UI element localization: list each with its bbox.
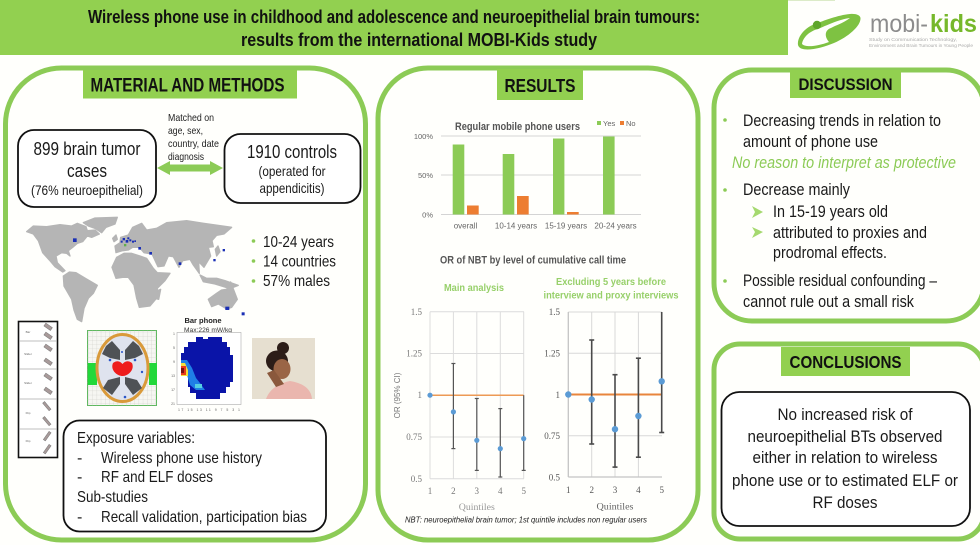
text: matching criteria: age, sex, xyxy=(168,125,203,137)
bar chart: regular mobile phone users: 100% xyxy=(414,132,433,141)
logo: mobi-kids: kids xyxy=(930,10,977,38)
box: exposure variables: RF and ELF doses xyxy=(101,469,213,486)
discussion bullets: attributed to proxies and xyxy=(773,224,927,242)
heading: conclusions: CONCLUSIONS xyxy=(790,352,902,372)
discussion bullets: prodromal effects. xyxy=(773,244,887,262)
box: conclusion statement: RF doses xyxy=(812,494,878,512)
box: brain tumor cases: (76% neuroepithelial) xyxy=(31,182,143,198)
chart: excluding 5 years OR: 1 xyxy=(566,485,571,495)
figure: SAR heat map: 5 xyxy=(173,346,175,350)
list: study population: 10-24 years xyxy=(263,234,334,251)
box: conclusion statement: neuroepithelial BTs observed xyxy=(748,428,942,446)
chart: excluding 5 years OR: 2 xyxy=(589,485,594,495)
heading: OR of NBT: OR of NBT by level of cumulative call time xyxy=(440,254,626,266)
figure: SAR heat map: 13 xyxy=(171,374,175,378)
heading: discussion: DISCUSSION xyxy=(798,75,892,94)
chart: main analysis OR: 0.5 xyxy=(411,474,422,484)
chart: excluding 5 years OR: 3 xyxy=(613,485,618,495)
discussion bullets: amount of phone use xyxy=(743,133,878,151)
subheading: excluding 5 years: Excluding 5 years before xyxy=(556,276,666,288)
box: controls: 1910 controls xyxy=(247,142,337,162)
logo: mobi-kids xyxy=(788,0,977,49)
box: exposure variables: Recall validation, participation bias xyxy=(101,509,307,526)
bar chart: regular mobile phone users: Regular mobile phone users xyxy=(455,121,580,133)
discussion bullets: Decrease mainly xyxy=(743,181,851,199)
discussion bullets: Decreasing trends in relation to xyxy=(743,112,941,130)
heading: conclusions xyxy=(781,347,910,376)
chart: excluding 5 years OR: 0.75 xyxy=(544,431,560,441)
heading: material and methods: MATERIAL AND METHODS xyxy=(90,74,284,96)
chart: main analysis OR: 1 xyxy=(428,486,432,496)
box: exposure variables: - xyxy=(77,469,82,486)
chart: main analysis OR xyxy=(393,307,526,513)
figure: phone positions table: Flip xyxy=(26,439,31,443)
world map xyxy=(27,217,245,322)
figure: phone positions table: Slider xyxy=(24,381,32,385)
footnote: NBT definition: NBT: neuroepithelial brain tumor; 1st quintile includes non regular users xyxy=(405,514,648,524)
box: exposure variables: Exposure variables: xyxy=(77,430,195,447)
logo wordmark: mobi- xyxy=(870,10,928,38)
logo tagline: Study on Communication Technology, xyxy=(869,37,957,42)
chart: excluding 5 years OR: 1 xyxy=(556,390,560,400)
subheading: main analysis: Main analysis xyxy=(444,282,504,294)
figure: SAR heat map: 1 xyxy=(173,332,175,336)
title banner xyxy=(0,0,788,55)
heading: discussion xyxy=(790,70,901,98)
subheading: excluding 5 years: interview and proxy interviews xyxy=(544,290,679,302)
figure: SAR heat map xyxy=(171,316,241,412)
list: study population xyxy=(252,234,336,290)
logo swoosh icon xyxy=(798,14,861,49)
photo: child with phone xyxy=(252,338,315,399)
figure: phone positions table xyxy=(18,322,58,458)
heading: results xyxy=(497,69,583,100)
box: brain tumor cases xyxy=(18,130,156,207)
discussion bullets: In 15-19 years old xyxy=(773,203,888,221)
chart: main analysis OR: 0.75 xyxy=(406,432,422,442)
box: conclusion statement: either in relation to wireless xyxy=(752,449,938,467)
chart: excluding 5 years OR: 4 xyxy=(636,485,641,495)
arrow: matched cases and controls xyxy=(157,161,223,175)
box: controls: (operated for xyxy=(258,163,326,179)
discussion bullets xyxy=(723,112,956,311)
bar chart: regular mobile phone users: 15-19 years xyxy=(545,222,587,230)
chart: excluding 5 years OR: 1.5 xyxy=(549,307,560,317)
chart: main analysis OR: 1.5 xyxy=(411,307,422,317)
panel: conclusions xyxy=(714,344,980,539)
bar chart: regular mobile phone users: 10-14 years xyxy=(495,222,537,230)
box: exposure variables: Sub-studies xyxy=(77,489,148,506)
chart: main analysis OR: 1 xyxy=(418,390,422,400)
bar chart: regular mobile phone users xyxy=(414,119,641,230)
box: exposure variables: Wireless phone use history xyxy=(101,450,262,467)
text: matching criteria: Matched on xyxy=(168,112,214,124)
list: study population: 14 countries xyxy=(263,254,336,270)
figure: SAR heat map: 21 xyxy=(171,402,175,406)
bar chart: regular mobile phone users: overall xyxy=(454,222,478,230)
bar chart: regular mobile phone users: 0% xyxy=(422,210,433,220)
text: matching criteria xyxy=(168,112,219,163)
chart: main analysis OR: 3 xyxy=(475,486,480,496)
title banner: results from the international MOBI-Kids study xyxy=(241,30,597,50)
text: matching criteria: diagnosis xyxy=(168,151,204,163)
discussion bullets: cannot rule out a small risk xyxy=(743,293,915,311)
heading: results: RESULTS xyxy=(504,75,576,96)
chart: excluding 5 years OR: 1.25 xyxy=(544,348,560,358)
box: exposure variables xyxy=(64,420,326,532)
chart: main analysis OR: Quintiles xyxy=(459,503,495,513)
chart: main analysis OR: 4 xyxy=(498,486,503,496)
figure: SAR heat map: 9 xyxy=(173,360,175,364)
figure: SAR heat map: 17 15 13 11 9 7 5 3 1 xyxy=(178,408,240,412)
chart: main analysis OR: 2 xyxy=(451,486,456,496)
subheading: excluding 5 years xyxy=(544,276,679,302)
legend: Yes xyxy=(603,119,615,128)
figure: brain exposure model xyxy=(88,330,157,406)
box: controls: appendicitis) xyxy=(260,180,324,196)
box: conclusion statement xyxy=(722,392,970,526)
bar chart: regular mobile phone users: 20-24 years xyxy=(594,222,637,230)
discussion bullets: Possible residual confounding – xyxy=(743,272,938,290)
chart: main analysis OR: OR (95% CI) xyxy=(393,372,402,418)
box: brain tumor cases: 899 brain tumor xyxy=(34,139,140,159)
chart: excluding 5 years OR: Quintiles xyxy=(596,502,634,512)
chart: excluding 5 years OR: 5 xyxy=(659,485,664,495)
heading: material and methods xyxy=(83,70,297,98)
title banner: Wireless phone use in childhood and adolescence and neuroepithelial brain tumours: xyxy=(88,7,700,27)
box: conclusion statement: phone use or to estimated ELF or xyxy=(732,472,958,490)
bar chart: regular mobile phone users: 50% xyxy=(418,171,433,180)
box: exposure variables: - xyxy=(77,450,82,467)
text: matching criteria: country, date xyxy=(168,138,219,150)
chart: main analysis OR: 1.25 xyxy=(406,348,422,358)
figure: SAR heat map: Bar phone xyxy=(184,316,222,325)
box: conclusion statement: No increased risk of xyxy=(778,406,913,424)
figure: phone positions table: Bar xyxy=(26,330,30,334)
chart: main analysis OR: 5 xyxy=(521,486,526,496)
panel: results xyxy=(378,68,698,540)
figure: SAR heat map: Max:226 mW/kg xyxy=(184,327,232,334)
figure: phone positions table: Slider xyxy=(24,352,32,356)
figure: phone positions table: Flip xyxy=(26,411,31,415)
logo: mobi-kids: Environment and Brain Tumours in Young People xyxy=(869,43,973,48)
legend xyxy=(597,119,636,128)
panel: material and methods xyxy=(6,68,366,540)
chart: excluding 5 years OR: 0.5 xyxy=(549,472,560,482)
chart: excluding 5 years OR xyxy=(544,307,665,512)
panel: discussion xyxy=(714,70,980,321)
figure: SAR heat map: 17 xyxy=(171,388,175,392)
legend: No xyxy=(626,119,636,128)
box: exposure variables: - xyxy=(77,509,82,526)
box: brain tumor cases: cases xyxy=(67,161,107,181)
list: study population: 57% males xyxy=(263,273,330,290)
box: controls xyxy=(224,134,360,203)
